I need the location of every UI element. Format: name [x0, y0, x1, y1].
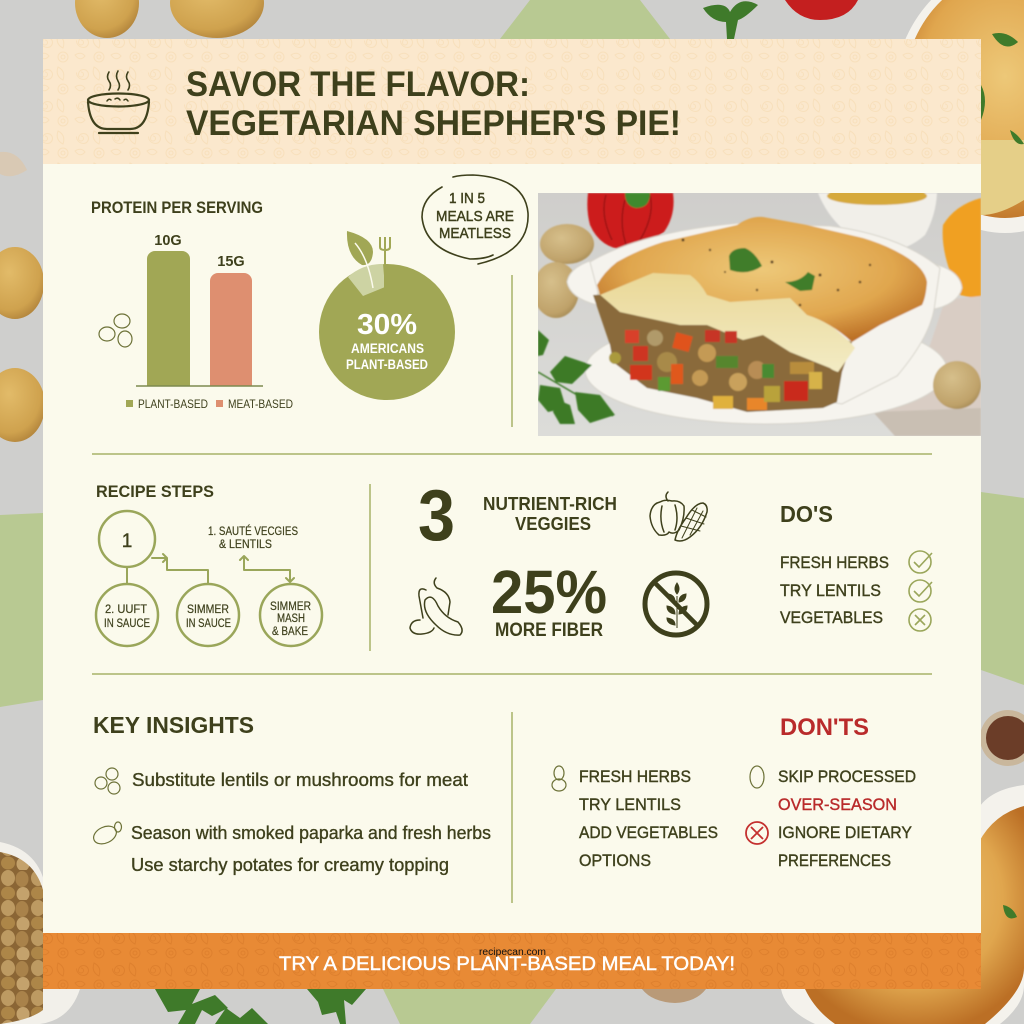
step circle 4 [260, 584, 322, 646]
step circle 3: SIMMER [187, 604, 229, 616]
bottom herbs [155, 989, 366, 1024]
icon: beans [99, 314, 132, 347]
bottom spoon of spice [642, 989, 706, 1003]
pie chart: 30% Americans plant-based: AMERICANS [351, 341, 424, 356]
step circle 4: & BAKE [272, 626, 308, 638]
step circle 4: SIMMER [270, 601, 311, 613]
filling [593, 290, 852, 412]
step circle 3 [177, 584, 239, 646]
panel: key insights: KEY INSIGHTS [93, 712, 254, 738]
icon: check [909, 551, 932, 573]
step label: saute veggies and lentils: & LENTILS [219, 539, 272, 551]
chart heading: PROTEIN PER SERVING [91, 199, 263, 217]
title: VEGETARIAN SHEPHER'S PIE! [186, 104, 681, 143]
icon: potato [91, 822, 122, 847]
flow connectors [127, 554, 294, 584]
panel: key insights: Season with smoked paparka and fresh herbs [131, 823, 491, 843]
panel: don'ts: DON'TS [780, 714, 869, 741]
list: good practices: OPTIONS [579, 851, 651, 870]
icon: bell pepper and corn [650, 492, 707, 541]
list: good practices [552, 766, 718, 870]
chart legend: PLANT-BASED [138, 397, 208, 411]
step circle 1 [99, 511, 155, 567]
crust specks [682, 238, 871, 306]
icon: red cross [746, 822, 768, 844]
step circle 4: MASH [277, 613, 305, 625]
panel: do's: TRY LENTILS [780, 581, 881, 600]
step circle 2: IN SAUCE [104, 618, 150, 630]
pie chart: 30% Americans plant-based: 30% [357, 309, 417, 341]
plate [584, 342, 946, 424]
stat: 3 nutrient-rich veggies: VEGGIES [515, 514, 591, 534]
linen cloth [873, 296, 981, 436]
panel: don'ts: SKIP PROCESSED [778, 767, 916, 786]
icon: steaming bowl [88, 71, 149, 133]
lentil bowl [0, 842, 80, 1024]
panel: key insights: Use starchy potates for creamy topping [131, 855, 449, 875]
golden crust top [597, 217, 927, 342]
spice bowl right [980, 710, 1024, 766]
icon: fork [380, 237, 390, 288]
pie chart: 30% Americans plant-based [319, 231, 455, 400]
stat: 3 nutrient-rich veggies: NUTRIENT-RICH [483, 494, 617, 514]
icon: two potatoes [552, 766, 566, 791]
panel: do's: FRESH HERBS [780, 553, 889, 572]
chart legend: MEAT-BASED [228, 397, 293, 411]
bar: meat-based 15G [210, 254, 252, 386]
icon: cross [909, 609, 931, 631]
list: good practices: ADD VEGETABLES [579, 823, 718, 842]
step label: saute veggies and lentils: 1. SAUTÉ VECGIES [208, 525, 298, 538]
pie chart: 30% Americans plant-based: PLANT-BASED [346, 357, 428, 372]
red bell pepper [587, 193, 674, 250]
step circle 2 [96, 584, 158, 646]
panel: don'ts: PREFERENCES [778, 851, 891, 870]
step circle 3: IN SAUCE [186, 618, 231, 630]
stat: 3 nutrient-rich veggies [418, 476, 617, 556]
garlic clove [0, 152, 27, 176]
potatoes [0, 0, 264, 442]
icon: lentils [95, 768, 120, 794]
heading: RECIPE STEPS [96, 482, 214, 501]
yellow bell pepper [943, 198, 981, 298]
callout: 1 in 5 meals are meatless: MEALS ARE [436, 208, 514, 225]
panel: key insights [91, 712, 491, 875]
bar: plant-based 10G: 10G [154, 233, 182, 249]
panel: key insights: Substitute lentils or mushrooms for meat [132, 770, 468, 790]
icon: potato [750, 766, 764, 788]
icon: check [909, 580, 932, 602]
step circle 2: 2. UUFT [105, 604, 147, 616]
chart legend [126, 397, 293, 411]
bottom right pie dish [781, 785, 1024, 1024]
step label: saute veggies and lentils [208, 525, 298, 551]
stat: 25% more fiber: 25% [491, 558, 607, 626]
bar: meat-based 15G: 15G [217, 254, 245, 270]
section: recipe steps [96, 482, 322, 646]
panel: do's [780, 501, 932, 631]
list: good practices: FRESH HERBS [579, 767, 691, 786]
parsley sprig on table [538, 330, 615, 424]
stat: 3 nutrient-rich veggies: 3 [418, 476, 455, 556]
watermark: recipecan.com [479, 947, 546, 958]
panel: do's: DO'S [780, 501, 833, 527]
veggie pieces in filling [609, 330, 822, 410]
potato by plate [933, 361, 981, 409]
bar: plant-based 10G [147, 233, 190, 386]
icon: eggplant and pepper [410, 578, 462, 635]
callout: 1 in 5 meals are meatless [422, 175, 528, 264]
mash layer [598, 270, 855, 372]
parsley on pie [729, 248, 815, 291]
panel: don'ts: IGNORE DIETARY [778, 823, 912, 842]
top right pie dish [893, 0, 1024, 233]
title [186, 65, 681, 143]
panel: don'ts [746, 714, 916, 870]
bar chart: protein per serving [91, 199, 293, 411]
list: good practices: TRY LENTILS [579, 795, 681, 814]
callout: 1 in 5 meals are meatless: 1 IN 5 [449, 190, 485, 207]
step circle 1: 1 [122, 531, 132, 552]
photo: vegetarian shepherd's pie [533, 187, 981, 436]
icon: no wheat [645, 573, 707, 635]
footer band [43, 933, 981, 989]
call to action: TRY A DELICIOUS PLANT-BASED MEAL TODAY! [279, 953, 735, 975]
bowl of corn [818, 193, 938, 247]
header band [43, 39, 981, 164]
stat: 25% more fiber: MORE FIBER [495, 619, 603, 641]
panel: don'ts: OVER-SEASON [778, 795, 897, 814]
dish handles [567, 258, 962, 310]
callout: 1 in 5 meals are meatless: MEATLESS [439, 225, 511, 242]
dish rim and wall [590, 223, 940, 404]
panel: do's: VEGETABLES [780, 608, 883, 627]
potatoes in photo [533, 224, 594, 318]
icon: leaf [347, 231, 373, 288]
top herbs and pepper [703, 0, 858, 39]
title: SAVOR THE FLAVOR: [186, 65, 530, 104]
